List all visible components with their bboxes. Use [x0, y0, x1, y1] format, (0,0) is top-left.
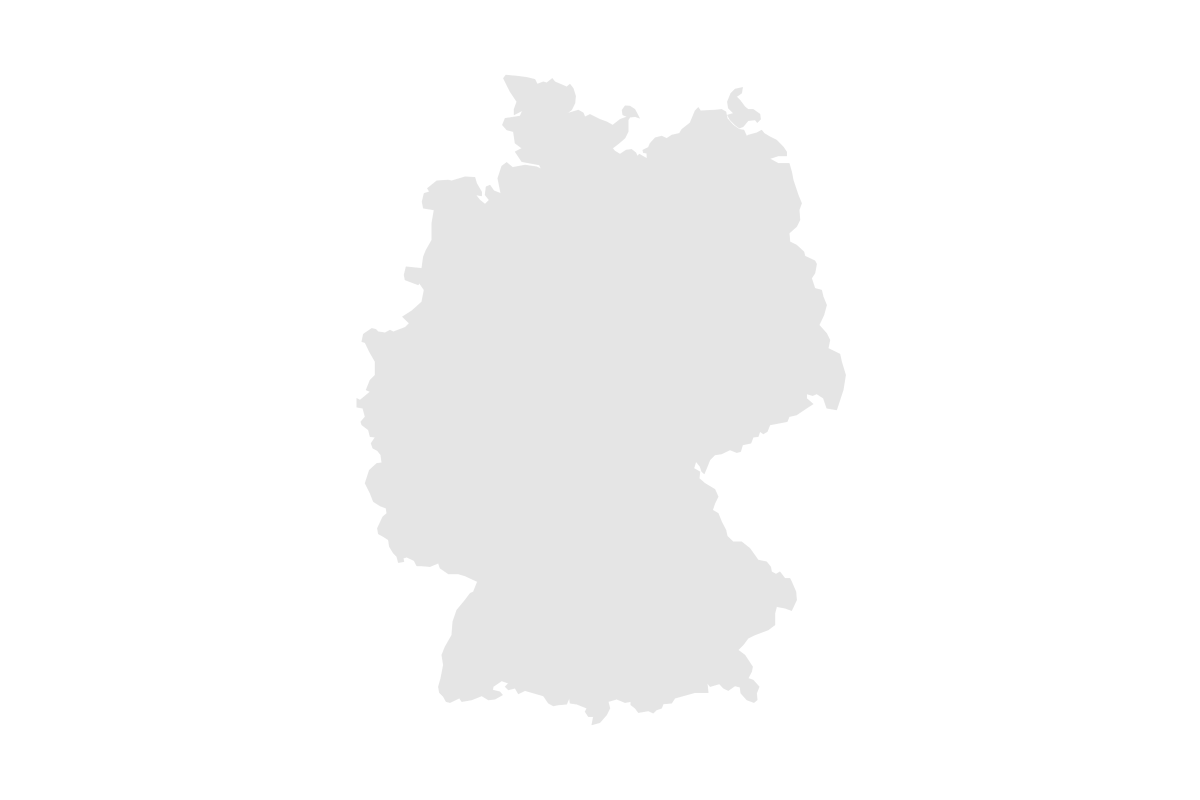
island: Ruegen	[727, 87, 761, 128]
mainland Germany	[357, 75, 846, 725]
map: Germany silhouette	[357, 75, 846, 725]
